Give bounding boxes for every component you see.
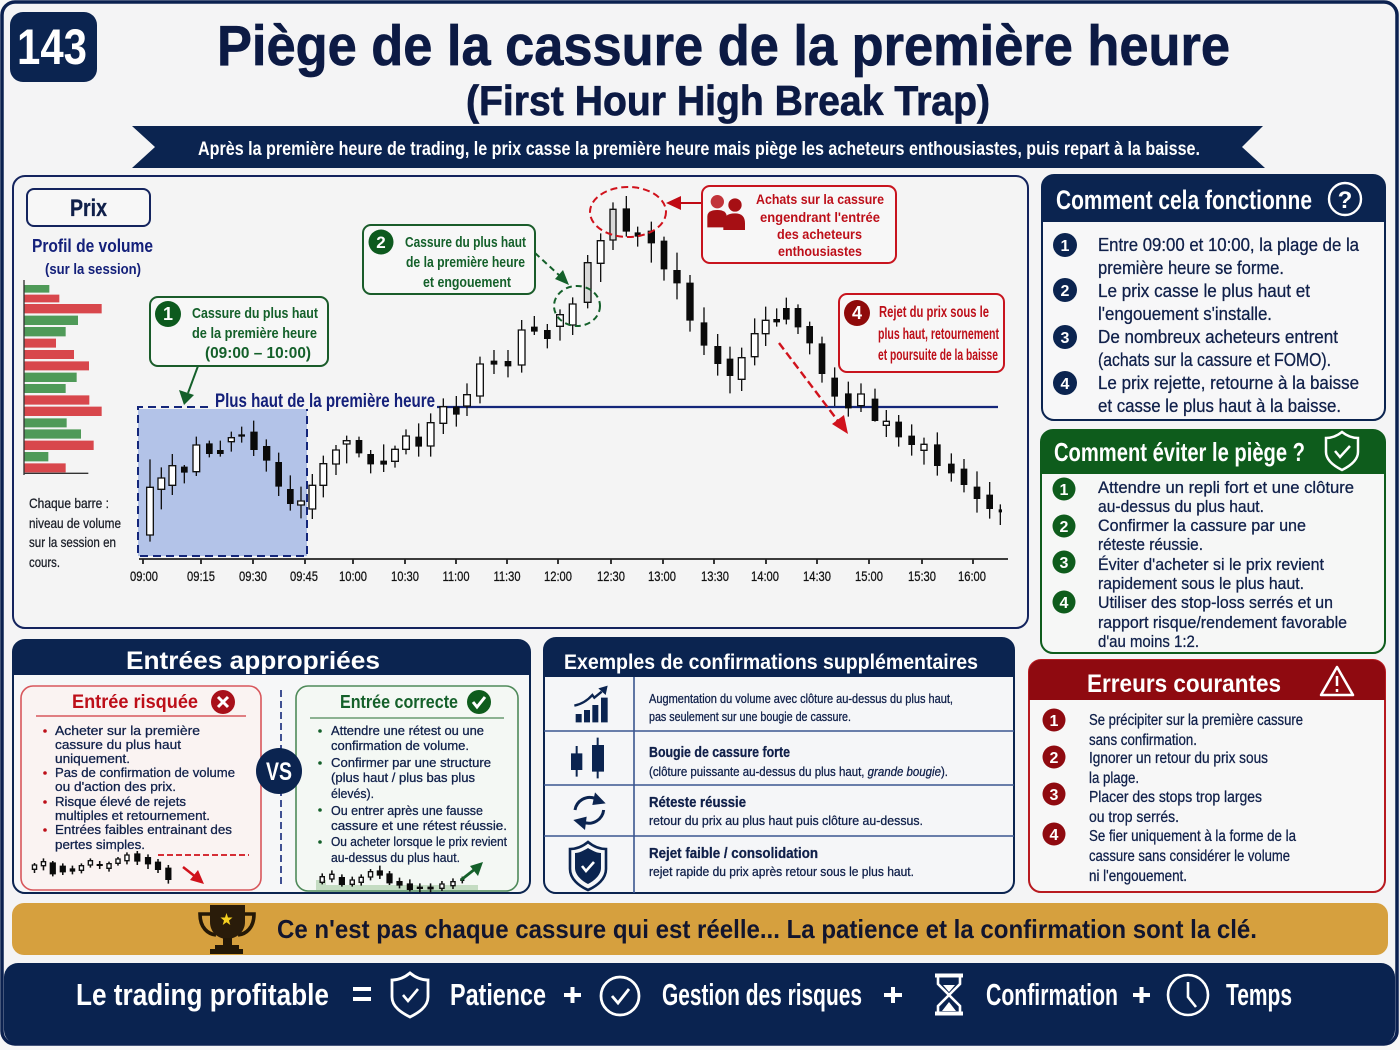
risky entry list [43,723,235,852]
correct entry list: cassure et une rétest réussie. [331,818,507,833]
VS badge [256,748,302,794]
icon: refresh arrows [573,792,606,830]
icon: trophy [200,905,254,954]
numbered mistakes: 2 [1050,750,1059,767]
icon: cross [211,690,235,714]
numbered steps: première heure se forme. [1098,258,1284,278]
numbered tips: rapport risque/rendement favorable [1098,614,1347,632]
callout 1: 1 [163,304,173,324]
row: strong candle: (clôture puissante au-dessus du plus haut, grande bougie). [649,764,948,779]
numbered steps: 2 [1061,283,1070,300]
icon: shield [570,842,606,890]
volume profile note: sur la session en [29,534,116,550]
icon: candles [571,738,604,778]
volume profile heading [32,236,153,278]
arrow: buyers callout to peak [666,196,702,210]
risky entry list: uniquement. [55,751,130,766]
panel: price chart [13,176,1028,628]
risky entry list: ou d'action des prix. [55,779,176,794]
callout 2 [363,225,535,294]
time axis: 15:00 [855,568,883,584]
numbered tips: 2 [1060,519,1069,536]
numbered tips: Utiliser des stop-loss serrés et un [1098,594,1333,612]
callout 3: buyers: engendrant l'entrée [760,209,880,225]
panel: how it works [1042,175,1385,420]
numbered mistakes: 4 [1050,827,1059,844]
time axis: 10:00 [339,568,367,584]
icon: clock [1168,975,1208,1015]
time axis: 13:30 [701,568,729,584]
correct entry list: Ou entrer après une fausse [331,803,483,818]
volume profile note: cours. [29,554,60,570]
icon: question: ? [1338,187,1352,214]
numbered mistakes: Se précipiter sur la première cassure [1089,712,1303,729]
gold banner: Ce n'est pas chaque cassure qui est réelle... La patience et la confirmation sont la clé. [277,914,1257,944]
numbered mistakes: ou trop serrés. [1089,809,1179,826]
arrow: callout 1 to first hour [179,366,198,405]
panel: how to avoid the trap [1041,430,1385,653]
correct entry list: Confirmer par une structure [331,755,491,770]
title [217,14,1230,124]
icon: rising bars [574,686,608,722]
green strip [316,880,478,890]
row: weak rejection [570,842,914,890]
correct entry list: Ou acheter lorsque le prix revient [331,834,507,849]
numbered tips: Attendre un repli fort et une clôture [1098,479,1354,497]
callout 1: de la première heure [192,325,317,342]
label: Prix: Prix [70,195,108,222]
volume profile note [29,495,121,570]
resistance dashes and red arrow [158,855,249,884]
time axis: 13:00 [648,568,676,584]
bottom equation bar: Le trading profitable [76,977,329,1012]
callout 4: rejection: plus haut, retournement [878,326,999,343]
correct entry list: au-dessus du plus haut. [331,850,460,865]
icon: warning [1321,667,1353,695]
card: risky entry: Entrée risquée [72,692,198,713]
numbered tips: d'au moins 1:2. [1098,633,1199,651]
numbered tips: au-dessus du plus haut. [1098,498,1264,516]
numbered tips: 1 [1060,482,1069,499]
time axis: 09:45 [290,568,318,584]
bottom equation bar: Temps [1226,977,1292,1012]
VS badge: VS [266,758,292,786]
volume profile heading: Profil de volume [32,236,153,256]
callout 2: et engouement [423,275,511,291]
time axis: 09:00 [130,568,158,584]
callout 3: buyers: des acheteurs [777,226,862,242]
numbered tips [1052,478,1354,651]
volume profile heading: (sur la session) [45,261,141,278]
panel: additional confirmations [544,638,1014,893]
mini chart: confirmed breakout [320,866,464,892]
callout 2: de la première heure [406,255,525,271]
risky entry list: Risque élevé de rejets [55,794,186,809]
time axis: 09:15 [187,568,215,584]
risky entry list: Acheter sur la première [55,723,200,738]
row: volume [574,686,953,724]
first hour high line: Plus haut de la première heure [215,391,435,412]
icon: question [1329,183,1361,215]
bottom equation bar: Patience [450,977,546,1012]
numbered tips: rapidement sous le plus haut. [1098,575,1304,593]
numbered steps: 4 [1061,376,1070,393]
row: strong candle: Bougie de cassure forte [649,745,790,761]
numbered steps: l'engouement s'installe. [1098,304,1272,324]
first hour zone [138,407,307,556]
dashed circle: buying climax [590,187,666,237]
time axis: 09:30 [239,568,267,584]
numbered steps: 1 [1061,238,1070,255]
arrow and circle: breakout [535,253,600,326]
volume profile note: Chaque barre : [29,495,109,511]
callout 1: (09:00 – 10:00) [205,345,311,362]
callout 1: Cassure du plus haut [192,305,318,322]
correct entry list: Attendre une rétest ou une [331,723,484,738]
icon: shield [392,973,428,1017]
numbered steps: De nombreux acheteurs entrent [1098,327,1338,347]
numbered tips: 4 [1060,595,1069,612]
callout 4: rejection: 4 [852,303,862,323]
title: Piège de la cassure de la première heure [217,14,1230,78]
numbered steps: Entre 09:00 et 10:00, la plage de la [1098,235,1360,255]
callout 2: Cassure du plus haut [405,235,526,251]
time axis: 11:00 [442,568,470,584]
numbered steps: 3 [1061,330,1070,347]
icon: circled check [601,977,639,1015]
risky entry list: multiples et retournement. [55,808,210,823]
time axis: 14:00 [751,568,779,584]
panel: how to avoid the trap: Comment éviter le piège ? [1054,437,1305,467]
row: volume: pas seulement sur une bougie de cassure. [649,710,851,724]
numbered steps: et casse le plus haut à la baisse. [1098,396,1341,416]
mini chart: failed breakout [32,851,171,884]
panel: appropriate entries: Entrées appropriées [126,647,380,675]
card: correct entry [296,686,518,892]
numbered steps: Le prix casse le plus haut et [1098,281,1310,301]
risky entry list: pertes simples. [55,837,145,852]
correct entry list: élevés). [331,786,374,801]
numbered steps: (achats sur la cassure et FOMO). [1098,350,1331,370]
time axis: 14:30 [803,568,831,584]
panel: how it works: Comment cela fonctionne [1056,185,1312,215]
label: Prix [27,189,150,226]
icon: check [467,690,491,714]
time axis [130,559,1008,584]
numbered mistakes: 3 [1050,787,1059,804]
time axis: 16:00 [958,568,986,584]
callout 3: buyers: Achats sur la cassure [756,191,884,207]
correct entry list: confirmation de volume. [331,738,469,753]
time axis: 11:30 [494,568,521,584]
row: weak rejection: rejet rapide du prix après retour sous le plus haut. [649,864,914,879]
candlesticks: afternoon [518,196,1002,525]
row: retest [573,792,923,830]
bottom equation bar: Gestion des risques [662,977,862,1012]
numbered mistakes: 1 [1050,713,1059,730]
callout 3: buyers [702,186,896,263]
equals and plus signs [353,987,1150,1003]
gold banner [12,903,1388,955]
ribbon subtitle [132,126,1265,168]
card: risky entry [21,686,261,890]
time axis: 12:00 [544,568,572,584]
row: weak rejection: Rejet faible / consolidation [649,846,818,862]
card: correct entry: Entrée correcte [340,691,458,712]
risky entry list: Pas de confirmation de volume [55,765,235,780]
numbered mistakes: Se fier uniquement à la forme de la [1089,828,1296,845]
numbered tips: Éviter d'acheter si le prix revient [1098,555,1324,574]
volume profile bars [24,280,102,475]
numbered mistakes: Ignorer un retour du prix sous [1089,750,1268,767]
risky entry list: Entrées faibles entrainant des [55,822,233,837]
panel: additional confirmations: Exemples de confirmations supplémentaires [564,651,978,674]
numbered mistakes: ni l'engouement. [1089,868,1187,885]
numbered steps: Le prix rejette, retourne à la baisse [1098,373,1359,393]
icon: buyers [707,195,745,230]
callout 4: rejection: Rejet du prix sous le [879,304,989,321]
row: retest: Réteste réussie [649,795,746,811]
panel: common mistakes [1029,660,1385,892]
numbered tips: Confirmer la cassure par une [1098,517,1306,535]
correct entry list [318,723,507,865]
row: retest: retour du prix au plus haut puis clôture au-dessus. [649,813,923,828]
time axis: 15:30 [908,568,936,584]
numbered mistakes: cassure sans considérer le volume [1089,848,1290,865]
numbered steps [1053,233,1360,416]
time axis: 10:30 [391,568,419,584]
dashed divider [280,690,282,885]
numbered tips: 3 [1060,555,1069,572]
badge: number 143: 143 [17,19,87,75]
bottom equation bar: Confirmation [986,977,1118,1012]
bottom equation bar [4,963,1395,1044]
callout 1 [150,297,328,366]
row: strong candle [571,738,948,779]
panel: common mistakes: Erreurs courantes [1087,670,1281,698]
time axis: 12:30 [597,568,625,584]
icon: shield check [1326,432,1358,470]
arrow: price rejection [779,343,848,434]
callout 3: buyers: enthousiastes [778,243,862,259]
risky entry list: cassure du plus haut [55,737,181,752]
numbered mistakes: sans confirmation. [1089,732,1197,749]
row: volume: Augmentation du volume avec clôture au-dessus du plus haut, [649,692,953,706]
callout 4: rejection [839,294,1004,372]
correct entry list: (plus haut / plus bas plus [331,770,475,785]
numbered tips: réteste réussie. [1098,536,1203,554]
title: (First Hour High Break Trap) [466,77,990,124]
icon: hourglass [935,976,963,1014]
numbered mistakes: Placer des stops trop larges [1089,789,1262,806]
callout 4: rejection: et poursuite de la baisse [878,347,998,364]
numbered mistakes [1042,708,1303,885]
candlesticks: morning [147,350,511,542]
volume profile note: niveau de volume [29,515,121,531]
numbered mistakes: la plage. [1089,770,1139,787]
panel: appropriate entries [13,640,530,893]
ribbon subtitle: Après la première heure de trading, le prix casse la première heure mais piège les acheteurs enthousiastes, puis repart à la baisse. [198,139,1200,160]
callout 2: 2 [376,233,386,252]
green arrow [461,862,483,880]
